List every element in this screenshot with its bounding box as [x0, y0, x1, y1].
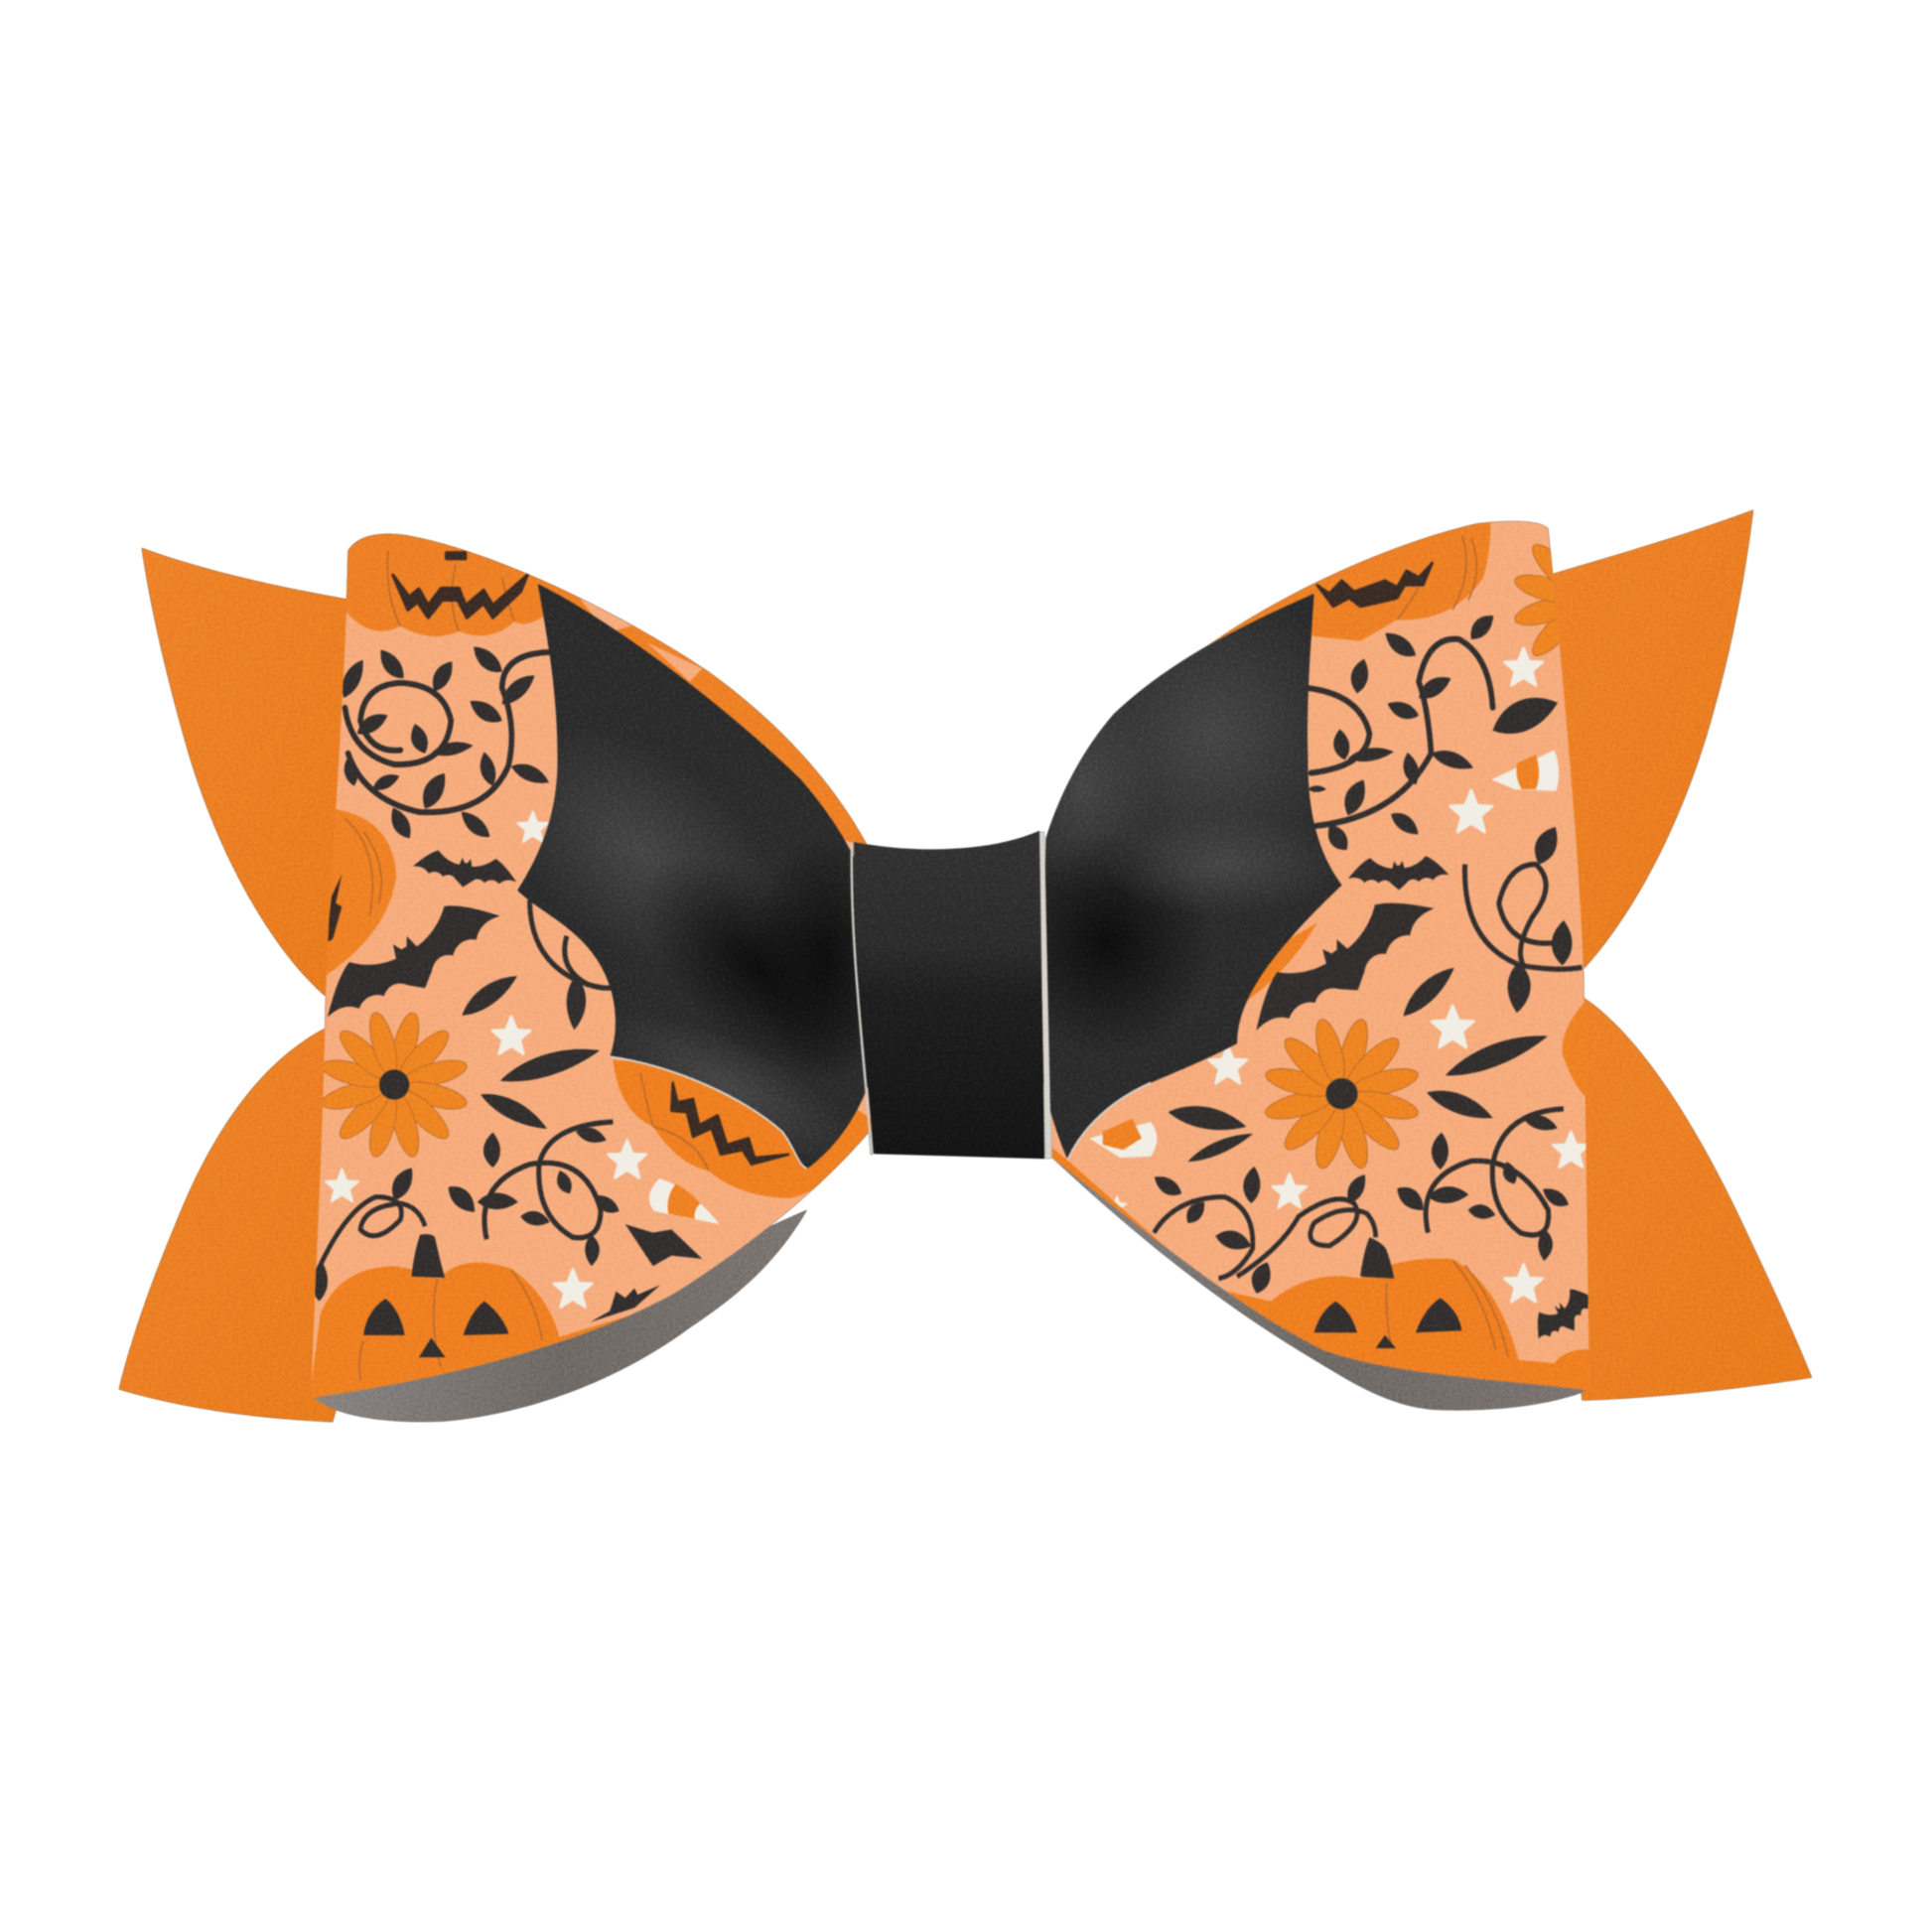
lower left vine — [311, 1163, 425, 1302]
right edge pumpkin — [1563, 998, 1588, 1099]
right black bat wing — [1003, 584, 1354, 1160]
upper vine — [336, 641, 552, 843]
wing cut edge — [610, 1056, 807, 1169]
centre knot — [852, 831, 1048, 1159]
back wing: right lower — [1558, 998, 1812, 1401]
back wing: left lower — [119, 1029, 369, 1422]
right half of bow — [1003, 510, 1812, 1410]
small bat — [1527, 1280, 1602, 1351]
vine behind wing — [530, 900, 616, 1031]
bottom pumpkin — [1039, 1138, 1594, 1399]
lower left vine — [1151, 1166, 1376, 1297]
flower — [319, 1010, 470, 1160]
peach glimpses near top edge — [576, 594, 702, 682]
grey underside of right loop — [1052, 1158, 1589, 1410]
candy corn partial — [1089, 1119, 1157, 1158]
leaf — [1486, 687, 1563, 743]
leaves — [461, 975, 518, 1017]
orange top edge band — [1039, 512, 1490, 851]
flower — [1263, 1017, 1421, 1171]
leaves — [1397, 960, 1459, 1023]
back wing: left upper — [142, 548, 351, 996]
grey underside of left loop — [311, 1210, 807, 1422]
lower bats — [625, 1224, 702, 1266]
whole bow with leather grain — [119, 510, 1812, 1422]
left half of bow — [119, 525, 913, 1422]
lower right vine — [1393, 1109, 1572, 1261]
candy corn — [1491, 751, 1559, 791]
knot band — [854, 831, 1044, 1159]
stars — [326, 812, 646, 1308]
orange top edge band — [345, 533, 868, 846]
top pumpkin mouth — [1317, 535, 1476, 620]
candy corn — [649, 1178, 720, 1224]
peach base — [311, 590, 872, 1384]
stars — [1107, 647, 1589, 1302]
knot left cut edge — [852, 842, 872, 1155]
back wing: right upper — [1548, 510, 1753, 969]
left black bat wing — [516, 584, 870, 1171]
peach base — [1039, 512, 1594, 1399]
top jack-o-lantern — [345, 533, 543, 637]
vine loop right — [1464, 822, 1583, 1014]
bow illustration — [117, 508, 1813, 1424]
wing cut edge — [1067, 1083, 1151, 1160]
bottom pumpkin — [310, 1233, 627, 1398]
pumpkin behind wing — [1237, 923, 1317, 1008]
left printed loop — [296, 525, 888, 1412]
right printed loop — [1050, 520, 1590, 1392]
upper vine — [1308, 610, 1498, 856]
bats — [412, 850, 516, 888]
knot right cut edge — [1041, 832, 1048, 1159]
middle pumpkin — [613, 1060, 881, 1198]
side pumpkin — [327, 809, 396, 975]
partial flower at top right — [1512, 523, 1658, 677]
bats — [1347, 855, 1449, 892]
lower centre vine — [444, 1122, 622, 1266]
